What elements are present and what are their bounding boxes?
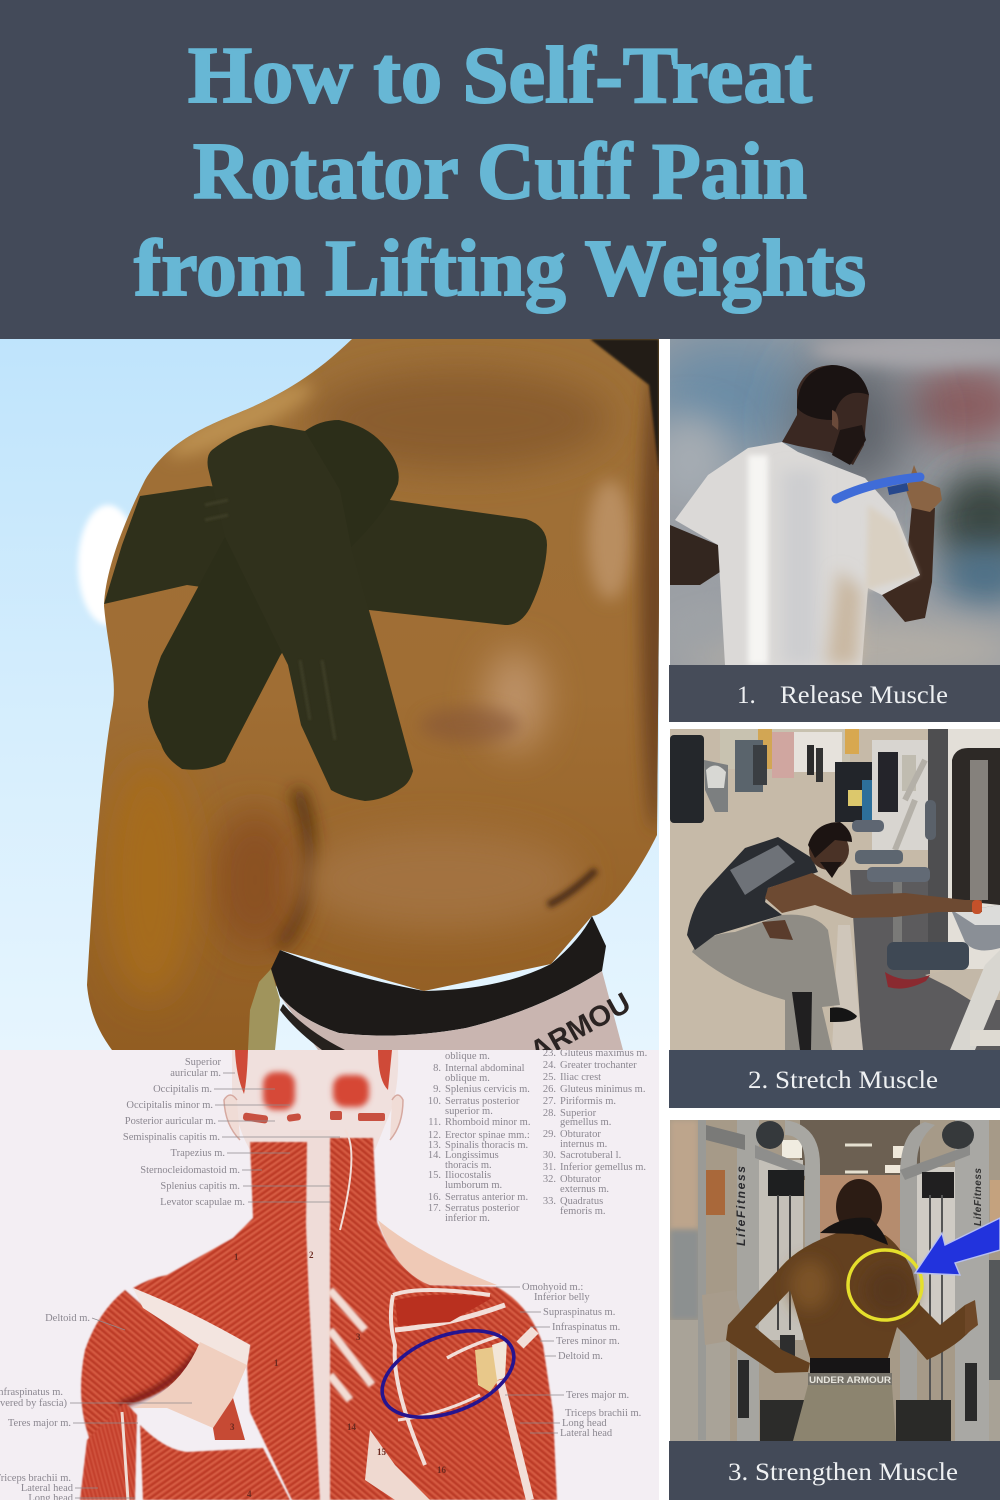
- photo: release muscle: [670, 339, 1000, 665]
- torso and arm: [87, 339, 659, 1050]
- tape: horizontal strip: [104, 486, 547, 625]
- muscle key column two: 23.: [543, 1048, 556, 1059]
- photo: stretch muscle: [670, 729, 1000, 1050]
- muscle key column two: 28.: [543, 1108, 556, 1119]
- caption: strengthen muscle: [669, 1441, 1000, 1500]
- caption: stretch muscle: 2. Stretch Muscle: [748, 1067, 938, 1094]
- muscle number markers: 15: [377, 1447, 386, 1457]
- muscle key column two: gemellus m.: [560, 1117, 611, 1128]
- left arm: [670, 525, 723, 585]
- muscle number markers: 3: [230, 1422, 235, 1432]
- muscle key column two: Iliac crest: [560, 1072, 601, 1083]
- left triceps: [80, 1402, 137, 1500]
- blue circle around rotator cuff: [380, 1329, 516, 1419]
- muscle key column two: Obturator: [560, 1174, 601, 1185]
- muscle key column one: thoracis m.: [445, 1160, 492, 1171]
- muscle key column one: 13.: [428, 1140, 441, 1151]
- man from behind: skin: [726, 1232, 978, 1373]
- muscle number markers: 4: [247, 1489, 252, 1499]
- muscle key column two: Piriformis m.: [560, 1096, 616, 1107]
- muscle key column one: 9.: [433, 1084, 441, 1095]
- muscle key column two: Superior: [560, 1108, 597, 1119]
- muscle number markers: [230, 1250, 446, 1499]
- muscle key column two: externus m.: [560, 1184, 609, 1195]
- muscle key column one: Serratus anterior m.: [445, 1192, 528, 1203]
- title text: How to Self-Treat: [188, 30, 812, 120]
- muscle key column two: Inferior gemellus m.: [560, 1162, 646, 1173]
- right labels: Teres minor m.: [556, 1336, 620, 1347]
- right labels: Supraspinatus m.: [543, 1307, 615, 1318]
- muscle key column two: 25.: [543, 1072, 556, 1083]
- left labels: Occipitalis m.: [153, 1084, 212, 1095]
- photo: strengthen muscle: [670, 1120, 1000, 1441]
- muscle key column one: Spinalis thoracis m.: [445, 1140, 528, 1151]
- muscle key column two: internus m.: [560, 1139, 607, 1150]
- man stretching: [687, 822, 982, 1050]
- head: [224, 1050, 403, 1150]
- blurred background: [670, 339, 1000, 665]
- muscle key column two: Gluteus minimus m.: [560, 1084, 645, 1095]
- waistband and pants: UNDER ARMOUR: [809, 1375, 891, 1386]
- right labels: Omohyoid m.:: [522, 1282, 583, 1293]
- muscle key column one: 15.: [428, 1170, 441, 1181]
- muscle key column one: Serratus posterior: [445, 1203, 520, 1214]
- muscle key column one: 8.: [433, 1063, 441, 1074]
- waistband: [271, 916, 606, 1036]
- muscle key column two: Quadratus: [560, 1196, 603, 1207]
- muscle key column one: 14.: [428, 1150, 441, 1161]
- left cable machine: LifeFitness: [734, 1166, 748, 1246]
- muscle key column two: 24.: [543, 1060, 556, 1071]
- left labels: Semispinalis capitis m.: [123, 1132, 220, 1143]
- blue massage tool: [836, 477, 920, 499]
- muscle key column one: Rhomboid minor m.: [445, 1117, 530, 1128]
- tape sheen: [205, 500, 335, 740]
- pale stripes on rhomboids: [330, 1290, 372, 1400]
- right labels: Long head: [562, 1418, 607, 1429]
- muscle key column one: inferior m.: [445, 1213, 490, 1224]
- right labels: Triceps brachii m.: [565, 1408, 641, 1419]
- muscle key column two: 29.: [543, 1129, 556, 1140]
- title text: Rotator Cuff Pain: [193, 126, 807, 216]
- left infraspinatus fascia: [133, 1342, 247, 1428]
- title text: from Lifting Weights: [134, 223, 866, 313]
- caption: stretch muscle: [669, 1050, 1000, 1108]
- right cable machine: LifeFitness: [973, 1168, 984, 1226]
- right labels: Inferior belly: [534, 1292, 590, 1303]
- rubber floor and walkway edge: [832, 870, 1000, 1050]
- left labels: Splenius capitis m.: [160, 1181, 240, 1192]
- infraspinatus detail: [475, 1347, 499, 1392]
- man's head and towel: [820, 1179, 888, 1245]
- muscle key column two: Greater trochanter: [560, 1060, 637, 1071]
- right labels: Deltoid m.: [558, 1351, 603, 1362]
- man's head and beard: [782, 365, 869, 465]
- gym background: [670, 729, 874, 823]
- muscle key column two: Sacrotuberal l.: [560, 1150, 621, 1161]
- left labels: Trapezius m.: [171, 1148, 225, 1159]
- left labels: Superior: [185, 1057, 221, 1068]
- left labels: Sternocleidomastoid m.: [140, 1165, 240, 1176]
- muscle key column one: Internal abdominal: [445, 1063, 525, 1074]
- right supraspinatus: [395, 1294, 492, 1326]
- muscle number markers: 14: [347, 1422, 356, 1432]
- muscle key column two: 27.: [543, 1096, 556, 1107]
- left cable machine: [698, 1120, 820, 1441]
- title text: [134, 30, 866, 313]
- muscle key column one: 11.: [428, 1117, 441, 1128]
- right labels: [496, 1282, 641, 1439]
- machine handle and frame: [950, 905, 1000, 1050]
- white t-shirt: [675, 442, 920, 665]
- waistband and pants: [793, 1358, 896, 1441]
- caption: strengthen muscle: 3. Strengthen Muscle: [728, 1459, 958, 1486]
- muscle key column one: Longissimus: [445, 1150, 499, 1161]
- right cable machine: [896, 1120, 989, 1441]
- muscle key column one: lumborum m.: [445, 1180, 502, 1191]
- right scapula tendons: [340, 1130, 535, 1500]
- yellow circle highlight: [848, 1250, 922, 1320]
- muscle number markers: 2: [309, 1250, 314, 1260]
- muscle key column one: 17.: [428, 1203, 441, 1214]
- lower right white fascia: [365, 1430, 430, 1500]
- caption: release muscle: 1.: [737, 682, 756, 709]
- muscle key column one: [428, 1051, 530, 1224]
- left labels: auricular m.: [170, 1068, 221, 1079]
- muscle key column two: 32.: [543, 1174, 556, 1185]
- photo: kinesiology tape on shoulder: [0, 339, 669, 1068]
- muscle key column two: [543, 1048, 647, 1217]
- left labels: Levator scapulae m.: [160, 1197, 245, 1208]
- muscle key column one: 10.: [428, 1096, 441, 1107]
- right labels: Lateral head: [560, 1428, 613, 1439]
- caption: release muscle: Release Muscle: [780, 682, 948, 709]
- muscle key column one: superior m.: [445, 1106, 493, 1117]
- left deltoid: [81, 1290, 200, 1440]
- body shading: [105, 370, 669, 1000]
- left tendon band: [133, 1288, 250, 1365]
- blue arrow: [915, 1218, 1000, 1275]
- muscle key column two: Gluteus maximus m.: [560, 1048, 647, 1059]
- muscle key column two: Obturator: [560, 1129, 601, 1140]
- left labels: Deltoid m.: [45, 1313, 90, 1324]
- waistband label strip: [248, 969, 629, 1050]
- left latissimus: [140, 1425, 290, 1500]
- waistband label strip: ARMOU: [525, 987, 636, 1068]
- left labels: Lateral head: [21, 1483, 74, 1494]
- muscle number markers: 16: [437, 1465, 446, 1475]
- left labels: Posterior auricular m.: [125, 1116, 216, 1127]
- right neck and back muscles: [330, 1138, 557, 1500]
- muscle key column one: Splenius cervicis m.: [445, 1084, 530, 1095]
- tape: strip to lower left: [148, 420, 399, 770]
- muscle key column one: oblique m.: [445, 1051, 490, 1062]
- muscle key column one: oblique m.: [445, 1073, 490, 1084]
- muscle key column two: 31.: [543, 1162, 556, 1173]
- muscle key column one: 12.: [428, 1130, 441, 1141]
- seat pads: [852, 820, 969, 989]
- muscle key column one: 16.: [428, 1192, 441, 1203]
- spine strip: [300, 1130, 330, 1500]
- caption: release muscle: [669, 665, 1000, 722]
- muscle key column two: femoris m.: [560, 1206, 606, 1217]
- left labels: Teres major m.: [8, 1418, 71, 1429]
- muscle key column one: Erector spinae mm.:: [445, 1130, 530, 1141]
- right neck skin: [378, 1220, 497, 1285]
- title banner: [0, 0, 1000, 339]
- tape: strip to lower right: [208, 425, 413, 801]
- muscle key column two: 30.: [543, 1150, 556, 1161]
- right labels: Teres major m.: [566, 1390, 629, 1401]
- left neck and trapezius: [133, 1142, 320, 1500]
- muscle number markers: 1: [234, 1252, 239, 1262]
- right machine and white wall: [872, 729, 1000, 969]
- muscle key column one: Serratus posterior: [445, 1096, 520, 1107]
- left labels: [0, 1057, 340, 1500]
- muscle key column two: 33.: [543, 1196, 556, 1207]
- right labels: Infraspinatus m.: [552, 1322, 620, 1333]
- muscle key column one: Iliocostalis: [445, 1170, 491, 1181]
- muscle number markers: 1: [274, 1358, 279, 1368]
- muscle number markers: 3: [356, 1332, 361, 1342]
- muscle key column two: 26.: [543, 1084, 556, 1095]
- anatomy chart: back muscles: [0, 1048, 659, 1500]
- dark hair at top right: [590, 339, 659, 473]
- left labels: Occipitalis minor m.: [126, 1100, 213, 1111]
- gym background: [670, 1120, 1000, 1441]
- right arm and hand: [882, 505, 935, 622]
